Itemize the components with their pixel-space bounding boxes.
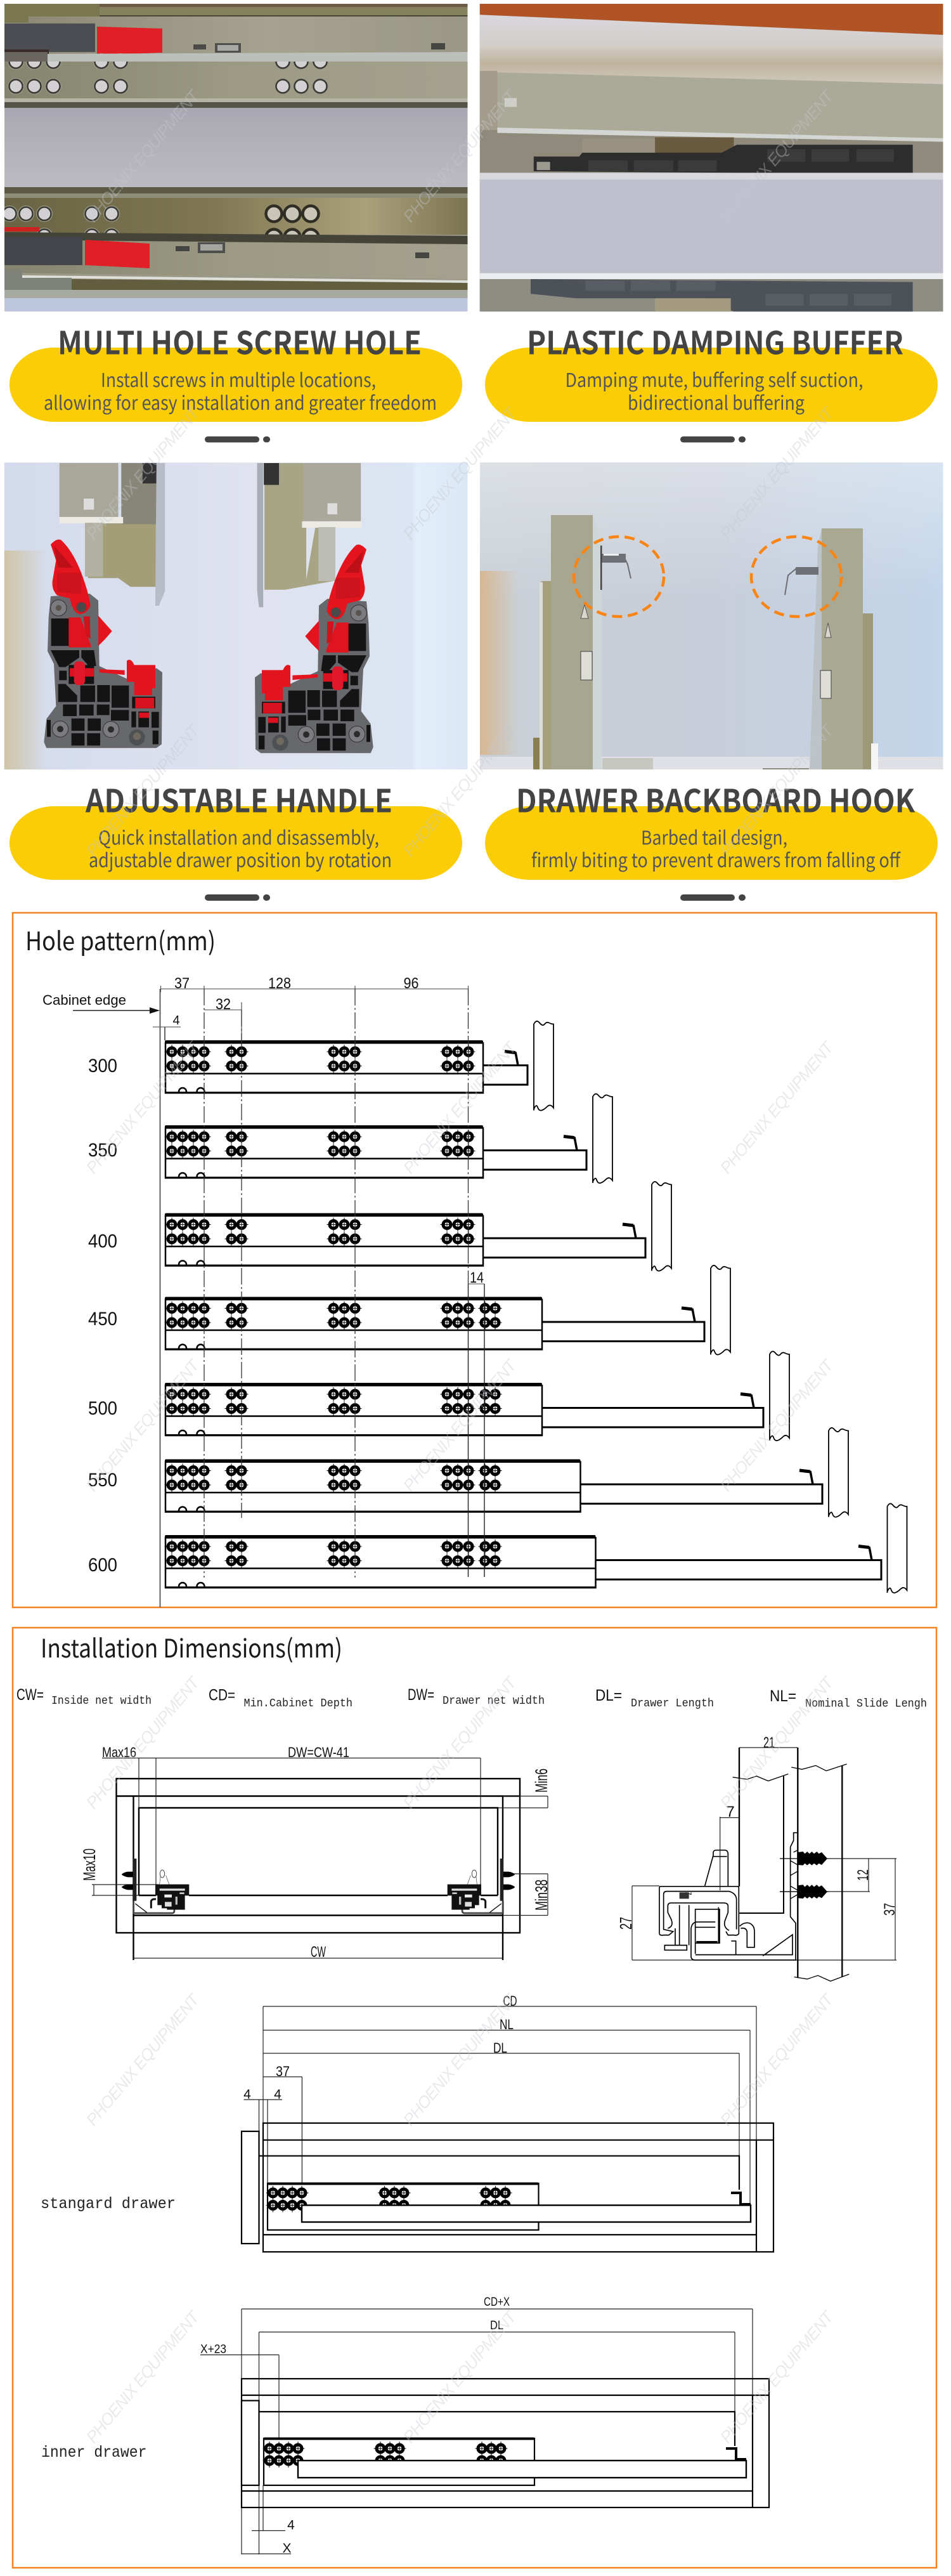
- dimension labels: Max16: [102, 1744, 136, 1760]
- dimension labels: [243, 1993, 517, 2102]
- dimension labels: 4: [274, 2087, 281, 2102]
- caption: Damping mute, buffering self suction,: [566, 365, 864, 393]
- caption: [44, 365, 437, 415]
- slide top rail: [268, 2182, 539, 2185]
- rail, bracket and screws profile: [659, 1748, 849, 1981]
- panel: hole pattern: [13, 913, 936, 1607]
- dimension labels: CD: [503, 1993, 517, 2009]
- dimension labels: Min6: [532, 1769, 551, 1793]
- row labels: 400: [88, 1231, 117, 1252]
- caption: Barbed tail design,: [641, 822, 787, 850]
- heading and caption: drawer backboard hook: [485, 776, 938, 901]
- dimension lines: [200, 2309, 753, 2554]
- photo: plastic damping buffer: [480, 4, 943, 311]
- yellow pill: [10, 348, 462, 422]
- row labels: 500: [88, 1398, 117, 1419]
- drawer row 300: [165, 1021, 553, 1111]
- caption: firmly biting to prevent drawers from falling off: [531, 845, 902, 873]
- dimension labels: X+23: [200, 2343, 226, 2356]
- dimension labels: 37: [276, 2063, 290, 2079]
- legend: DL=: [595, 1687, 622, 1704]
- watermarks: PHOENIX EQUIPMENT: [82, 86, 204, 226]
- cabinet edge label and arrow: Cabinet edge: [42, 992, 126, 1008]
- top dimensions: 37: [174, 975, 190, 992]
- watermarks: PHOENIX EQUIPMENT: [399, 86, 521, 226]
- slide top rail: [264, 2437, 534, 2440]
- legend: Inside net width: [51, 1695, 152, 1708]
- dimension labels: DW=CW-41: [288, 1744, 349, 1760]
- drawer row 600: [165, 1503, 907, 1593]
- watermarks: PHOENIX EQUIPMENT: [716, 1672, 838, 1812]
- row labels: 600: [88, 1555, 117, 1576]
- dimension 14: 14: [470, 1269, 484, 1286]
- front view drawing: [80, 1744, 551, 1961]
- top dimensions: 128: [268, 975, 291, 992]
- top dimensions: 96: [403, 975, 418, 992]
- legend: Drawer net width: [443, 1695, 545, 1708]
- dimension labels: [616, 1734, 898, 1960]
- heading: MULTI HOLE SCREW HOLE: [58, 318, 422, 364]
- watermarks: PHOENIX EQUIPMENT: [82, 1989, 204, 2129]
- legend: Drawer Length: [631, 1697, 714, 1710]
- drawer row 450: [165, 1265, 730, 1355]
- vertical centre lines: [204, 989, 484, 1578]
- row labels: [88, 1056, 117, 1576]
- drawer row 400: [165, 1182, 671, 1271]
- cabinet and drawer outlines: [242, 2123, 773, 2252]
- inner drawer drawing: [41, 2296, 769, 2556]
- dimension labels: [80, 1744, 551, 1961]
- right handle mechanism: [255, 544, 373, 753]
- watermarks: PHOENIX EQUIPMENT: [716, 86, 838, 226]
- left handle mechanism: [44, 539, 162, 748]
- dimension labels: 7: [726, 1803, 735, 1821]
- top dimensions: 4: [172, 1014, 180, 1028]
- watermarks: PHOENIX EQUIPMENT: [82, 1355, 204, 1495]
- row labels: 550: [88, 1470, 117, 1491]
- watermarks: PHOENIX EQUIPMENT: [716, 1355, 838, 1495]
- panel frame: [13, 1628, 936, 2568]
- heading: hole pattern: Hole pattern(mm): [25, 921, 216, 958]
- row labels: 300: [88, 1056, 117, 1076]
- dimension labels: CD+X: [484, 2296, 510, 2309]
- dimension labels: [200, 2296, 510, 2556]
- heading: ADJUSTABLE HANDLE: [85, 776, 392, 822]
- cabinet edge line: [160, 989, 165, 1607]
- caption: [566, 365, 864, 415]
- photo: multi hole screw hole: [1, 4, 468, 311]
- label: inner drawer: inner drawer: [41, 2443, 147, 2462]
- dimension lines: [243, 2006, 756, 2205]
- heading and caption: multi hole screw hole: [10, 318, 462, 443]
- pager dots: [205, 894, 270, 901]
- drawer row 500: [165, 1351, 789, 1441]
- watermarks: PHOENIX EQUIPMENT: [82, 1672, 204, 1812]
- dimension labels: 21: [763, 1734, 775, 1751]
- watermarks: PHOENIX EQUIPMENT: [82, 1037, 204, 1177]
- dimension labels: DL: [490, 2319, 503, 2332]
- pager dots: [205, 436, 270, 443]
- dimension labels: 4: [243, 2087, 251, 2102]
- caption: Quick installation and disassembly,: [98, 822, 379, 850]
- top dimensions: 32: [216, 996, 231, 1013]
- caption: [89, 822, 392, 873]
- dimension labels: 27: [616, 1917, 635, 1930]
- pager dots: [680, 436, 746, 443]
- orange dashed circle right: [751, 537, 841, 617]
- watermarks: PHOENIX EQUIPMENT: [399, 1355, 521, 1495]
- legend: Min.Cabinet Depth: [243, 1697, 353, 1710]
- slide extension and hook: [298, 2449, 746, 2478]
- standard drawer drawing: [41, 1993, 773, 2252]
- dimension labels: Min38: [532, 1880, 551, 1911]
- top dimensions: [153, 975, 468, 1040]
- caption: allowing for easy installation and greater freedom: [44, 388, 437, 415]
- panel: installation dimensions: [13, 1628, 936, 2568]
- watermarks: PHOENIX EQUIPMENT: [716, 403, 838, 543]
- dimension labels: NL: [500, 2017, 514, 2032]
- dimension labels: 37: [881, 1903, 898, 1916]
- legend: CW=: [16, 1686, 44, 1704]
- legend: CD=: [209, 1686, 235, 1704]
- dimension labels: Max10: [80, 1848, 99, 1881]
- watermarks: [82, 86, 838, 2447]
- legend: NL=: [770, 1687, 796, 1705]
- row labels: 450: [88, 1309, 117, 1330]
- cabinet and drawer outlines: [242, 2379, 769, 2507]
- watermarks: PHOENIX EQUIPMENT: [716, 2306, 838, 2447]
- watermarks: PHOENIX EQUIPMENT: [399, 1672, 521, 1812]
- thin guide lines: [92, 1758, 548, 1958]
- dimension labels: 4: [287, 2518, 295, 2532]
- photo background and slides: [4, 462, 468, 769]
- watermarks: PHOENIX EQUIPMENT: [399, 720, 521, 860]
- yellow pill: [485, 348, 938, 422]
- left slide profile: [122, 1859, 189, 1913]
- legend: Nominal Slide Lengh: [805, 1697, 927, 1710]
- heading: installation dimensions: Installation Dimensions(mm): [41, 1628, 342, 1665]
- row labels: 350: [88, 1140, 117, 1161]
- slide extension and hook: [302, 2193, 751, 2222]
- orange dashed circle left: [574, 537, 664, 617]
- photo: drawer backboard hook: [480, 462, 943, 769]
- cabinet outline: [117, 1779, 520, 1960]
- cross section drawing: [616, 1734, 898, 1981]
- drawer row 550: [165, 1428, 848, 1517]
- watermarks: PHOENIX EQUIPMENT: [716, 1989, 838, 2129]
- dimension labels: X: [282, 2541, 292, 2556]
- legend: [16, 1686, 927, 1710]
- watermarks: PHOENIX EQUIPMENT: [399, 403, 521, 543]
- heading: DRAWER BACKBOARD HOOK: [516, 776, 915, 822]
- watermarks: PHOENIX EQUIPMENT: [82, 2306, 204, 2447]
- slide holes: [262, 2442, 507, 2468]
- right slide profile: [448, 1859, 515, 1913]
- caption: adjustable drawer position by rotation: [89, 845, 392, 873]
- photo background and rails: [480, 462, 943, 769]
- watermarks: PHOENIX EQUIPMENT: [399, 2306, 521, 2447]
- watermarks: PHOENIX EQUIPMENT: [82, 720, 204, 860]
- pager dots: [680, 894, 746, 901]
- watermarks: PHOENIX EQUIPMENT: [716, 1037, 838, 1177]
- legend: DW=: [408, 1686, 434, 1704]
- photo: adjustable handle: [4, 462, 468, 769]
- heading and caption: adjustable handle: [10, 776, 462, 901]
- watermarks: PHOENIX EQUIPMENT: [716, 720, 838, 860]
- yellow pill: [10, 806, 462, 880]
- dimension labels: 12: [855, 1869, 872, 1881]
- yellow pill: [485, 806, 938, 880]
- dimension labels: CW: [311, 1944, 326, 1961]
- panel frame: [13, 913, 936, 1607]
- cabinet edge label and arrow: [42, 992, 160, 1014]
- watermarks: PHOENIX EQUIPMENT: [399, 1989, 521, 2129]
- dimension labels: DL: [493, 2040, 507, 2056]
- watermarks: PHOENIX EQUIPMENT: [82, 403, 204, 543]
- slide holes: [266, 2186, 512, 2213]
- caption: Install screws in multiple locations,: [101, 365, 376, 393]
- caption: bidirectional buffering: [628, 388, 805, 415]
- caption: [531, 822, 902, 873]
- heading: PLASTIC DAMPING BUFFER: [527, 318, 903, 364]
- label: stangard drawer: stangard drawer: [41, 2195, 176, 2213]
- drawer row 350: [165, 1094, 612, 1183]
- heading and caption: plastic damping buffer: [485, 318, 938, 443]
- watermarks: PHOENIX EQUIPMENT: [399, 1037, 521, 1177]
